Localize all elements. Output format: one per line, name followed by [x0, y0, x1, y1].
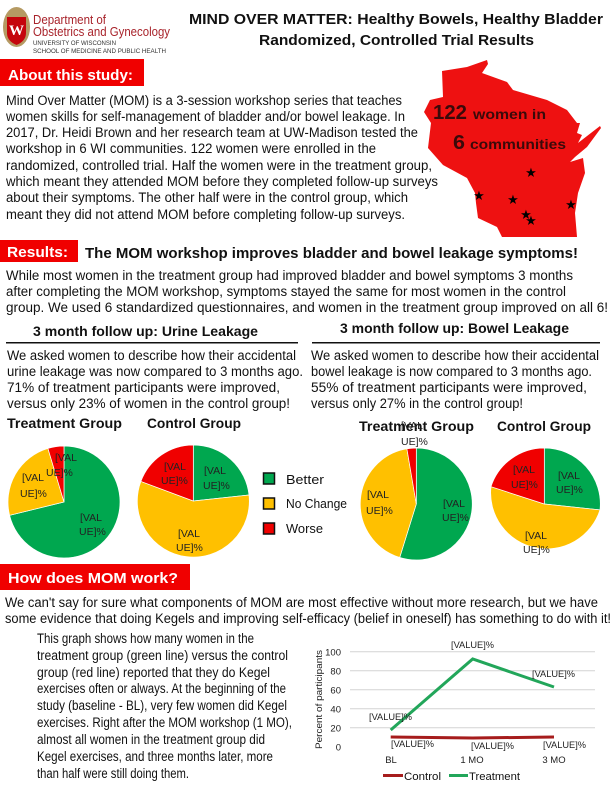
text block: bowel leakage: We asked women to describe how their accidental	[311, 348, 599, 363]
y axis labels: 100	[325, 648, 341, 658]
legend	[264, 473, 347, 536]
x axis labels: BL	[385, 755, 397, 766]
treatment line	[391, 659, 554, 730]
pie chart: urine leakage treatment group: UE]%	[79, 526, 106, 538]
text block: urine leakage	[7, 348, 303, 411]
data labels: [VALUE]%	[471, 741, 515, 752]
map: wisconsin with community stars: 122	[433, 102, 467, 124]
pie chart: urine leakage control group: [VAL	[178, 528, 200, 540]
text block: results: While most women in the treatment group had improved bladder and bowel symptoms 3 months	[6, 268, 573, 283]
text block: graph explanation: exercises. Right after the MOM workshop (1 MO),	[37, 715, 292, 730]
title	[189, 12, 603, 49]
map: wisconsin with community stars: 6	[453, 132, 465, 154]
text block: about this study: about their symptoms. The other half were in the control group, which	[6, 190, 408, 205]
pie chart: urine leakage treatment group: UE]%	[20, 488, 47, 500]
stars: ★	[525, 165, 537, 180]
logo: department of obstetrics and gynecology: UNIVERSITY OF WISCONSIN	[33, 40, 116, 47]
pie chart: bowel leakage control group: UE]%	[523, 544, 550, 556]
text block: results: group. We used 6 standardized questionnaires, and women in the treatment group improved on all 6!	[6, 300, 608, 315]
data labels	[369, 640, 587, 752]
text block: graph explanation: exercises often or always. At the beginning of the	[37, 681, 286, 696]
text block: about this study: workshop in 6 WI communities. 122 women were enrolled in the	[5, 141, 376, 156]
text block: graph explanation: than half were still doing them.	[37, 766, 189, 781]
pie chart: bowel leakage treatment group: [VAL	[401, 420, 423, 432]
x axis labels	[385, 755, 566, 766]
x axis labels: 3 MO	[542, 755, 566, 766]
stars: ★	[565, 197, 577, 212]
pie chart: urine leakage control group: [VAL	[204, 465, 226, 477]
subheading: bowel leakage: 3 month follow up: Bowel Leakage	[340, 321, 569, 336]
stars: ★	[525, 213, 537, 228]
line chart: kegel exercise by group	[314, 640, 595, 783]
logo: department of obstetrics and gynecology: Department of	[33, 12, 106, 27]
data labels: [VALUE]%	[532, 669, 576, 680]
heading: results	[0, 240, 78, 262]
pie chart: bowel leakage treatment group: UE]%	[401, 436, 428, 448]
text block: graph explanation: treatment group (green line) versus the control	[37, 648, 288, 663]
text block: graph explanation	[37, 631, 292, 781]
pie chart: urine leakage control group: UE]%	[203, 480, 230, 492]
heading: results: Results:	[7, 244, 68, 261]
text block: graph explanation: This graph shows how many women in the	[37, 631, 254, 646]
text block: how does mom work: We can't say for sure what components of MOM are most effective without more research, but we have	[5, 595, 598, 610]
text block: about this study: 2017, Dr. Heidi Brown and her research team at UW-Madison tested the	[6, 125, 418, 140]
text block: graph explanation: almost all women in the treatment group did	[37, 732, 265, 747]
data labels: [VALUE]%	[369, 712, 413, 723]
icon: university crest	[3, 7, 30, 47]
text block: graph explanation: Kegel exercises, and three months later, more	[37, 749, 273, 764]
legend: Worse	[286, 522, 323, 536]
pie chart: urine leakage treatment group	[7, 416, 122, 558]
text block: urine leakage: versus only 23% of women in the control group!	[7, 396, 290, 411]
title: MIND OVER MATTER: Healthy Bowels, Healthy Bladder	[189, 12, 603, 28]
stars: ★	[507, 192, 519, 207]
pie chart: bowel leakage treatment group: [VAL	[443, 498, 465, 510]
pie chart: urine leakage control group	[137, 416, 249, 557]
text block: about this study: Mind Over Matter (MOM) is a 3-session workshop series that teaches	[6, 93, 402, 108]
pie chart: urine leakage control group: Control Group	[147, 416, 241, 431]
pie chart: urine leakage treatment group: [VAL	[55, 452, 77, 464]
pie chart: urine leakage control group: UE]%	[176, 542, 203, 554]
control line	[391, 737, 554, 738]
pie chart: bowel leakage control group: UE]%	[556, 484, 583, 496]
pie chart: urine leakage control group: UE]%	[161, 475, 188, 487]
pie chart: urine leakage treatment group: Treatment Group	[7, 416, 122, 431]
text block: about this study: meant they did not attend MOM before completing follow-up surveys.	[6, 207, 405, 222]
y axis labels: 20	[330, 724, 341, 734]
y axis title: Percent of participants	[314, 650, 325, 749]
pie chart: bowel leakage treatment group: Treatment Group	[359, 419, 474, 434]
chart legend	[383, 771, 520, 783]
text block: urine leakage: We asked women to describe how their accidental	[7, 348, 296, 363]
data labels: [VALUE]%	[391, 739, 435, 750]
stars	[473, 165, 577, 228]
map: wisconsin with community stars: communities	[470, 136, 566, 152]
x axis labels: 1 MO	[460, 755, 484, 766]
stars: ★	[520, 207, 532, 222]
pie chart: urine leakage treatment group: [VAL	[22, 472, 44, 484]
pie chart: bowel leakage treatment group	[359, 419, 474, 560]
pie chart: bowel leakage control group: Control Group	[497, 419, 591, 434]
pie chart: bowel leakage control group: UE]%	[511, 479, 538, 491]
text block: bowel leakage	[311, 348, 599, 411]
heading: how does mom work	[0, 564, 190, 590]
stars: ★	[473, 188, 485, 203]
heading: about this study: About this study:	[8, 67, 133, 84]
logo: department of obstetrics and gynecology: Obstetrics and Gynecology	[33, 24, 170, 39]
text block: about this study	[5, 93, 438, 222]
y axis labels: 60	[330, 686, 341, 696]
text block: urine leakage: 71% of treatment participants were improved,	[7, 380, 280, 395]
data labels: [VALUE]%	[451, 640, 495, 651]
pie chart: bowel leakage control group: [VAL	[513, 464, 535, 476]
pie chart: bowel leakage control group: [VAL	[525, 530, 547, 542]
heading: how does mom work: How does MOM work?	[8, 570, 178, 587]
logo: department of obstetrics and gynecology: SCHOOL OF MEDICINE AND PUBLIC HEALTH	[33, 48, 166, 55]
text block: graph explanation: study (baseline - BL), very few women did Kegel	[37, 698, 287, 713]
pie chart: urine leakage treatment group: UE]%	[46, 467, 73, 479]
y axis labels	[325, 648, 341, 754]
text block: bowel leakage: versus only 27% in the control group!	[311, 396, 523, 411]
y axis labels: 40	[330, 704, 341, 716]
chart legend: Treatment	[469, 771, 520, 783]
text block: results	[6, 268, 608, 315]
data labels: [VALUE]%	[543, 740, 587, 751]
map: wisconsin with community stars	[424, 60, 601, 237]
logo: department of obstetrics and gynecology	[3, 7, 170, 55]
legend: Better	[286, 473, 324, 487]
legend: No Change	[286, 497, 347, 511]
text block: about this study: which meant they attended MOM before they completed follow-up surveys	[5, 174, 438, 189]
text block: how does mom work	[5, 595, 611, 626]
pie chart: bowel leakage treatment group: [VAL	[367, 489, 389, 501]
pie chart: bowel leakage treatment group: UE]%	[366, 505, 393, 517]
chart legend: Control	[404, 771, 441, 783]
text block: graph explanation: group (red line) reported that they do Kegel	[37, 665, 270, 680]
icon: university crest: W	[9, 23, 24, 39]
text block: about this study: randomized, controlled trial. Half the women were in the treatment group,	[6, 158, 432, 173]
heading: about this study	[0, 59, 144, 86]
pie chart: bowel leakage control group: [VAL	[558, 470, 580, 482]
text block: results: after completing the MOM workshop, symptoms stayed the same for most women in the control	[6, 284, 566, 299]
y axis labels: 80	[330, 666, 341, 678]
pie chart: bowel leakage control group	[491, 419, 600, 556]
pie chart: urine leakage control group: [VAL	[164, 461, 186, 473]
text block: bowel leakage: 55% of treatment participants were improved,	[311, 380, 587, 395]
pie chart: urine leakage treatment group: [VAL	[80, 512, 102, 524]
text block: urine leakage: urine leakage was now compared to 3 months ago.	[7, 364, 303, 379]
map: wisconsin with community stars: women in	[472, 106, 546, 122]
subheading: urine leakage: 3 month follow up: Urine Leakage	[33, 324, 259, 339]
title: Randomized, Controlled Trial Results	[259, 33, 534, 49]
text block: bowel leakage: bowel leakage is now compared to 3 months ago.	[311, 364, 592, 379]
y axis labels: 0	[336, 742, 341, 754]
pie chart: bowel leakage treatment group: UE]%	[442, 512, 469, 524]
text block: about this study: women skills for self-management of bladder and/or bowel leakage. In	[5, 109, 405, 124]
headline: workshop improves symptoms: The MOM workshop improves bladder and bowel leakage symptoms!	[85, 246, 578, 262]
